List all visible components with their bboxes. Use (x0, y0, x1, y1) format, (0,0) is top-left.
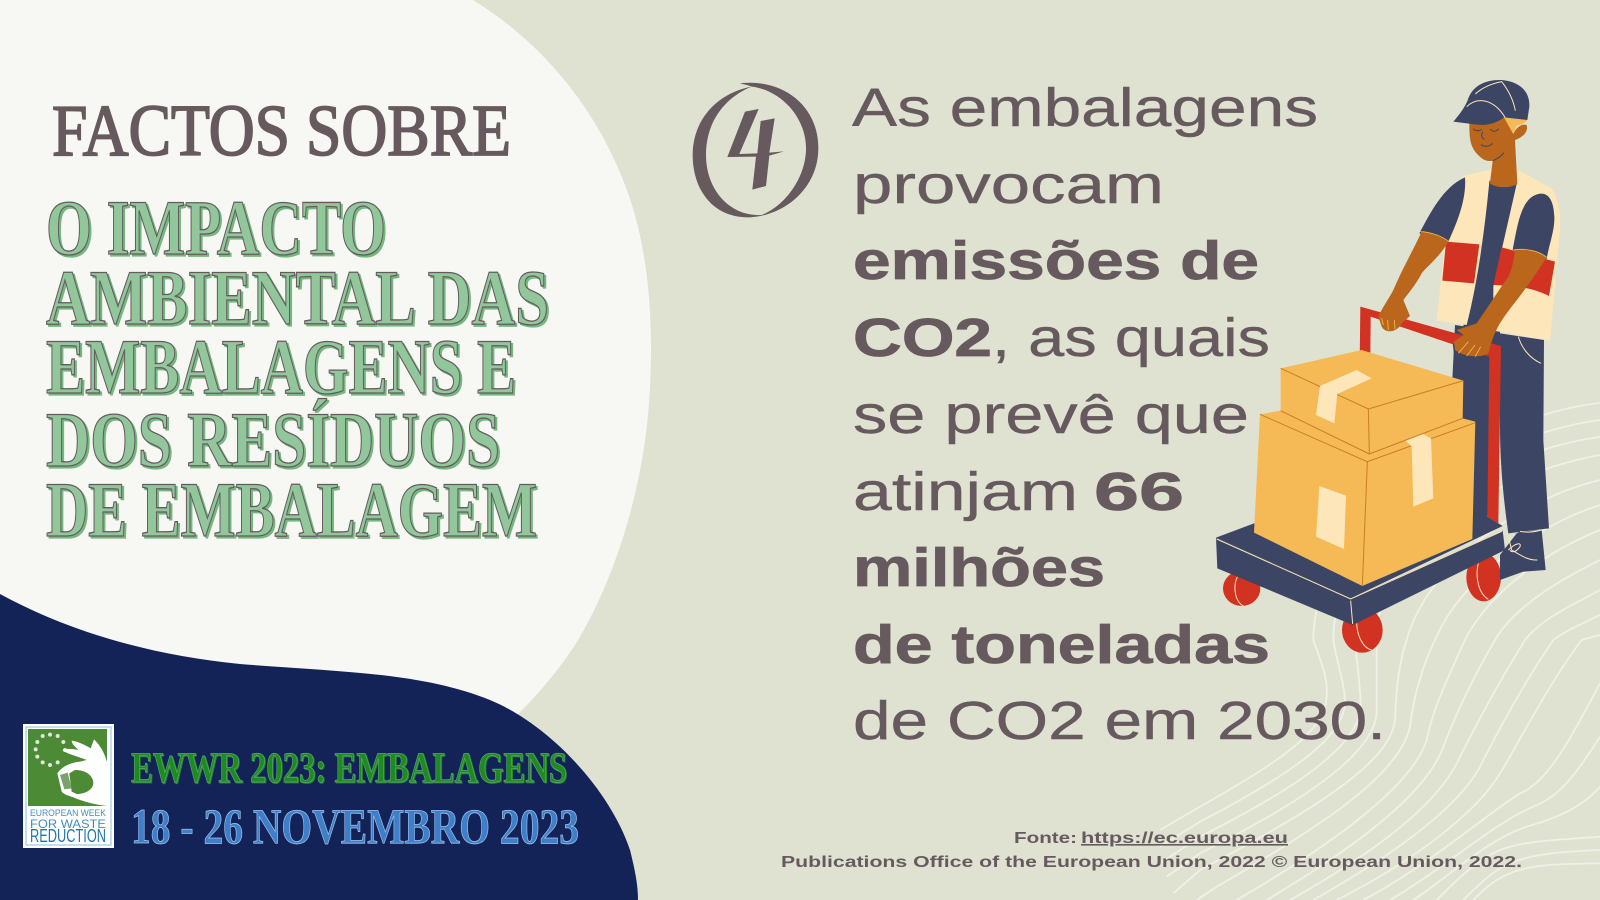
logo text (30, 808, 106, 846)
body text: 66 (1094, 462, 1184, 522)
title: o impacto ambiental: AMBIENTAL DAS (46, 254, 549, 341)
title: o impacto ambiental: EMBALAGENS E (46, 323, 516, 410)
icon: circled number 4 (693, 83, 818, 217)
title: o impacto ambiental (46, 184, 549, 553)
arms and hands (1378, 232, 1448, 331)
body text (852, 78, 1386, 751)
heading: factos sobre: FACTOS SOBRE (52, 90, 511, 171)
shoe lace (1508, 530, 1542, 560)
event dates: 18 - 26 NOVEMBRO 2023 (131, 798, 579, 854)
worker shoe (1500, 530, 1546, 580)
body text: , as quais (992, 308, 1270, 368)
lower box (1254, 411, 1475, 586)
safety vest (1437, 169, 1492, 325)
trolley platform (1216, 517, 1505, 625)
logo text: EUROPEAN WEEK (30, 808, 106, 818)
body text: se prevê que (853, 385, 1249, 445)
icon: hand holding bin (57, 739, 107, 806)
hair (1504, 117, 1527, 134)
title: o impacto ambiental: DOS RESÍDUOS (46, 396, 500, 483)
worker back leg (1452, 340, 1500, 527)
worker upper body (1378, 80, 1560, 357)
upper box (1281, 350, 1463, 454)
white blob panel (0, 0, 651, 722)
body text: provocam (853, 155, 1164, 215)
body text: atinjam (853, 462, 1078, 522)
body text: emissões de (853, 231, 1259, 291)
logo: European Week for Waste Reduction (23, 724, 114, 848)
body text: As embalagens (852, 78, 1318, 138)
logo text: FOR WASTE (30, 818, 106, 831)
sleeves (1419, 177, 1465, 242)
trolley wheels (1223, 553, 1501, 653)
trolley handle (1359, 307, 1501, 523)
shirt (1463, 180, 1517, 330)
body text: de toneladas (853, 615, 1270, 675)
body text: de CO2 em 2030. (853, 691, 1386, 751)
source text: https://ec.europa.eu (1081, 830, 1288, 847)
body text: CO2 (853, 308, 992, 368)
cap (1453, 80, 1529, 125)
source text: Fonte: (1014, 830, 1077, 847)
body text: milhões (853, 538, 1105, 598)
source text (781, 830, 1522, 871)
worker front leg (1452, 325, 1549, 533)
logo text: REDUCTION (30, 826, 106, 846)
face details (1473, 129, 1504, 161)
navy wave panel (0, 594, 638, 900)
source text: Publications Office of the European Union, 2022 © European Union, 2022. (781, 854, 1522, 871)
title: o impacto ambiental: O IMPACTO (46, 184, 386, 271)
vest red bands (1442, 242, 1479, 283)
neck and face (1469, 117, 1527, 187)
icon: circle of stars (34, 733, 67, 767)
event theme: EWWR 2023: EMBALAGENS (131, 745, 567, 792)
illustration: worker pushing boxes on trolley (1216, 80, 1560, 653)
title: o impacto ambiental: DE EMBALAGEM (46, 466, 537, 553)
icon: bin (60, 773, 72, 789)
